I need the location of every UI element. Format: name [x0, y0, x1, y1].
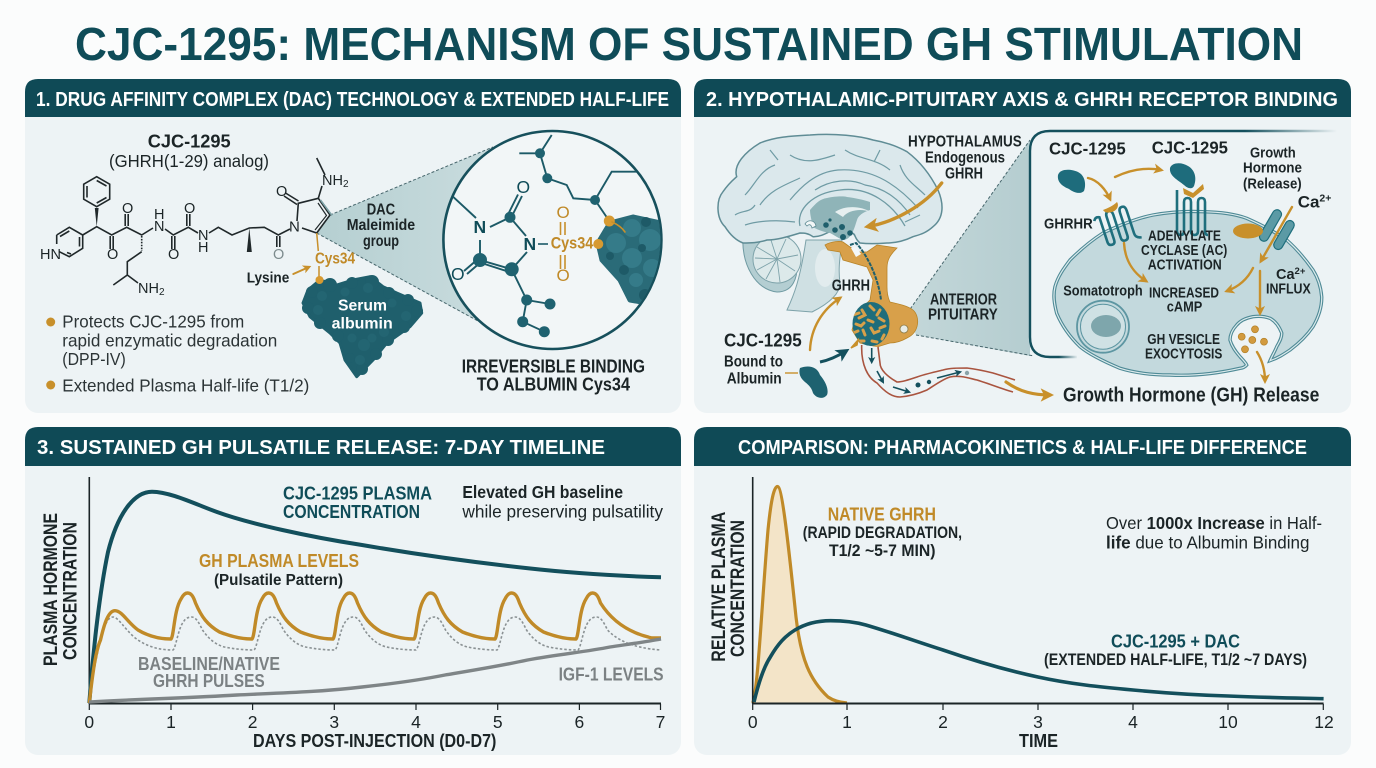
cerebrum — [718, 134, 942, 244]
labels: hypothalamus: GHRH — [945, 165, 983, 182]
bullet list: rapid enzymatic degradation — [62, 331, 277, 351]
panel: DAC technology — [25, 79, 681, 413]
y axis title — [41, 513, 81, 666]
bullet list: Extended Plasma Half-life (T1/2) — [62, 376, 309, 396]
tick labels: 4 — [411, 712, 421, 732]
albumin label: Serum — [338, 298, 387, 315]
inset: somatotroph cell — [1030, 131, 1337, 381]
inset labels: CYCLASE (AC) — [1141, 243, 1227, 259]
tick labels: 0 — [748, 712, 758, 732]
label: IGF-1: IGF-1 LEVELS — [559, 664, 664, 685]
chemical structure of CJC-1295: O — [184, 201, 195, 217]
inset labels: Ca — [1298, 192, 1319, 211]
note: elevated baseline: while preserving pulsatility — [461, 502, 663, 522]
brain folds — [735, 150, 925, 226]
maleimide ring — [451, 148, 600, 337]
panel 3 header: 3. SUSTAINED GH PULSATILE RELEASE: 7-DAY TIMELINE — [37, 436, 605, 459]
inset labels: (Release) — [1243, 176, 1302, 192]
tick labels: 2 — [938, 712, 948, 732]
axes and ticks — [753, 477, 1324, 710]
bullet list: Protects CJC-1295 from — [62, 311, 244, 331]
magnification cone — [902, 140, 1034, 356]
native GHRH area fill — [753, 486, 847, 703]
albumin label — [332, 298, 393, 332]
inset labels: 2+ — [1319, 192, 1331, 204]
label: DAC maleimide group: group — [363, 233, 399, 250]
chemical structure of CJC-1295: H — [154, 207, 164, 223]
maleimide ring: O — [451, 264, 465, 284]
chemical structure of CJC-1295: 2 — [343, 179, 349, 190]
label: growth hormone release: Growth Hormone (GH) Release — [1063, 385, 1319, 407]
tick labels: 3 — [1033, 712, 1043, 732]
albumin fragment — [598, 217, 670, 303]
tick labels: 4 — [1128, 712, 1138, 732]
label: baseline native pulses: BASELINE/NATIVE — [138, 653, 280, 674]
caption: irreversible binding — [462, 355, 645, 395]
note: half-life increase — [1106, 513, 1322, 553]
magnified circle: maleimide binding — [443, 131, 670, 349]
inset labels: cAMP — [1167, 300, 1203, 316]
icon: albumin complex with arrow — [799, 340, 858, 398]
chemical structure of CJC-1295: NH — [138, 281, 159, 297]
tick labels: 2 — [248, 712, 257, 732]
label: CJC-1295 plasma — [283, 482, 432, 522]
molecule name: CJC-1295 — [148, 131, 231, 152]
arrow: hypothalamus input — [868, 183, 942, 226]
curve: baseline native GHRH pulses — [89, 617, 661, 703]
label: native GHRH: (RAPID DEGRADATION, — [803, 524, 962, 542]
inset labels: Growth — [1250, 145, 1296, 161]
chemical structure of CJC-1295: H — [198, 240, 208, 256]
label: CJC-1295 plasma: CJC-1295 PLASMA — [283, 482, 432, 503]
chemical structure of CJC-1295: N — [289, 218, 300, 236]
y axis title: CONCENTRATION — [60, 522, 81, 660]
bound ligand — [1183, 184, 1204, 198]
chemical structure of CJC-1295: N — [198, 228, 208, 244]
inset labels: 2+ — [1295, 266, 1306, 277]
labels: anterior pituitary: ANTERIOR — [930, 291, 997, 308]
inset labels: CJC-1295 — [1049, 138, 1126, 158]
inset labels: Hormone — [1243, 161, 1302, 177]
maleimide ring: N — [524, 234, 536, 254]
calcium channel — [1258, 208, 1296, 251]
thalamus — [810, 196, 870, 240]
CJC-1295 ligand, free — [1058, 170, 1085, 193]
label: baseline native pulses — [138, 653, 280, 691]
cysteine linkage: Cys34 — [551, 234, 594, 252]
tick labels: 1 — [842, 712, 852, 732]
chemical structure of CJC-1295: N — [154, 219, 164, 235]
label: CJC-1295 + DAC — [1044, 631, 1307, 669]
chemical structure of CJC-1295: O — [168, 247, 179, 263]
label: CJC-1295 + DAC: CJC-1295 + DAC — [1111, 631, 1240, 652]
chemical structure of CJC-1295: O — [273, 247, 284, 263]
inset labels: Somatotroph — [1063, 283, 1143, 300]
panel 1 header: 1. DRUG AFFINITY COMPLEX (DAC) TECHNOLOGY & EXTENDED HALF-LIFE — [36, 88, 669, 111]
inset labels: GHRHR — [1044, 215, 1093, 232]
label: native GHRH: T1/2 ~5-7 MIN) — [829, 542, 936, 560]
inset labels — [1044, 137, 1331, 362]
label: GH plasma levels — [199, 550, 359, 589]
hypothalamic neurons — [823, 218, 853, 240]
ligand on left receptor — [1103, 202, 1118, 213]
label: native GHRH: NATIVE GHRH — [828, 504, 936, 525]
labels: Cys34 and lysine: Cys34 — [315, 250, 355, 267]
label: DAC maleimide group — [347, 201, 416, 250]
panel 2 header — [694, 79, 1351, 117]
tick labels: 6 — [575, 712, 584, 732]
panel 4 header: COMPARISON: PHARMACOKINETICS & HALF-LIFE DIFFERENCE — [738, 436, 1307, 459]
inset labels: CJC-1295 — [1152, 137, 1228, 157]
vesicle granules — [1238, 326, 1268, 353]
GH store — [1233, 224, 1263, 238]
tick labels: 7 — [656, 712, 665, 732]
curve: native GHRH — [753, 486, 847, 703]
note: elevated baseline: Elevated GH baseline — [462, 482, 623, 502]
chemical structure of CJC-1295: O — [107, 247, 118, 263]
curve: CJC-1295 + DAC — [754, 621, 1324, 702]
inset labels: Ca — [1276, 267, 1295, 283]
chemical structure of CJC-1295: O — [122, 201, 133, 217]
brainstem — [787, 240, 842, 312]
panel 2 header: 2. HYPOTHALAMIC-PITUITARY AXIS & GHRH RECEPTOR BINDING — [706, 88, 1338, 111]
panel: pharmacokinetics comparison — [694, 427, 1351, 755]
label: CJC-1295 bound to albumin: Albumin — [727, 370, 782, 387]
bullet list: (DPP-IV) — [62, 349, 126, 369]
chemical structure of CJC-1295: 2 — [159, 287, 165, 298]
labels: Cys34 and lysine: Lysine — [247, 269, 289, 286]
chemical structure of CJC-1295: HN — [40, 247, 61, 263]
illustration: brain and pituitary — [718, 134, 942, 347]
tick labels: 0 — [84, 712, 94, 732]
maleimide ring: O — [516, 177, 530, 197]
y axis title: PLASMA HORMONE — [41, 513, 62, 666]
tick labels: 3 — [329, 712, 339, 732]
chemical structure of CJC-1295 — [40, 158, 349, 298]
note: elevated baseline — [461, 482, 663, 522]
inset labels: INCREASED — [1149, 285, 1219, 301]
cell arrows — [1088, 169, 1292, 381]
label: CJC-1295 bound to albumin: CJC-1295 — [724, 331, 802, 351]
tick labels: 10 — [1218, 712, 1238, 732]
inset labels: INFLUX — [1266, 281, 1311, 297]
tick labels — [84, 712, 665, 732]
panel 3 header — [25, 427, 681, 466]
inset labels: EXOCYTOSIS — [1145, 346, 1223, 362]
caption: irreversible binding: TO ALBUMIN Cys34 — [477, 374, 631, 395]
inset labels: ACTIVATION — [1148, 257, 1222, 273]
tick labels: 5 — [493, 712, 503, 732]
panel 4 header — [694, 427, 1351, 466]
GH transport arrows — [872, 348, 969, 392]
label: GHRH: GHRH — [832, 278, 870, 295]
cysteine linkage: O — [556, 266, 570, 285]
label: CJC-1295 bound to albumin — [724, 331, 802, 387]
caption: irreversible binding: IRREVERSIBLE BINDING — [462, 355, 645, 376]
curve: CJC-1295 plasma — [89, 492, 661, 703]
line chart: half-life comparison — [709, 477, 1334, 751]
bullet list — [46, 311, 309, 396]
nucleus — [1077, 301, 1129, 353]
label: GH plasma levels: (Pulsatile Pattern) — [214, 572, 343, 589]
arrow: to GH release — [1006, 382, 1050, 395]
labels: Cys34 and lysine — [247, 250, 355, 286]
tick labels: 12 — [1314, 712, 1334, 732]
molecule name: (GHRH(1-29) analog) — [109, 151, 269, 171]
note: half-life increase: Over 1000x Increase in Half- — [1106, 513, 1322, 533]
x axis title: DAYS POST-INJECTION (D0-D7) — [253, 731, 496, 751]
panel: hypothalamic-pituitary axis — [694, 79, 1351, 413]
GHRHR receptor centre — [1177, 190, 1208, 235]
chemical structure of CJC-1295: NH — [322, 173, 343, 189]
axes and ticks — [89, 477, 661, 710]
CJC-1295 ligand, bound — [1170, 163, 1195, 188]
albumin label: albumin — [332, 315, 393, 332]
labels: hypothalamus: HYPOTHALAMUS — [908, 134, 1022, 151]
label: DAC maleimide group: DAC — [367, 201, 395, 218]
chemical structure of CJC-1295: O — [276, 184, 287, 200]
labels: hypothalamus: Endogenous — [925, 149, 1005, 166]
cysteine linkage: O — [556, 203, 570, 222]
label: DAC maleimide group: Maleimide — [347, 217, 416, 234]
cysteine linkage — [538, 203, 625, 285]
curve: IGF-1 levels — [89, 639, 661, 702]
note: half-life increase: life due to Albumin Binding — [1106, 533, 1310, 553]
label: CJC-1295 bound to albumin: Bound to — [724, 354, 783, 371]
y axis title — [709, 511, 749, 662]
labels: anterior pituitary: PITUITARY — [928, 306, 998, 323]
labels: hypothalamus — [908, 134, 1022, 182]
panel 1 header — [25, 79, 681, 117]
icon: serum albumin protein — [302, 275, 423, 377]
blood vessels — [862, 345, 1015, 397]
cerebellum — [743, 230, 801, 292]
maleimide ring: N — [474, 217, 486, 237]
GHRHR receptor left — [1093, 204, 1142, 250]
y axis title: CONCENTRATION — [728, 520, 749, 657]
inset labels: GH VESICLE — [1147, 332, 1220, 348]
arrow: CJC-1295 to GHRH — [810, 298, 840, 350]
label: baseline native pulses: GHRH PULSES — [153, 670, 265, 691]
inset labels: ADENYLATE — [1148, 229, 1221, 245]
label: CJC-1295 + DAC: (EXTENDED HALF-LIFE, T1/2 ~7 DAYS) — [1044, 651, 1307, 669]
cell body — [1054, 211, 1322, 375]
molecule name — [109, 131, 269, 171]
label: native GHRH — [803, 504, 962, 560]
curve: GH plasma levels — [89, 593, 661, 703]
title: CJC-1295: MECHANISM OF SUSTAINED GH STIMULATION — [75, 18, 1303, 70]
pituitary stalk and posterior lobe — [825, 241, 918, 347]
anterior pituitary lobe — [852, 302, 908, 346]
tick labels: 1 — [166, 712, 176, 732]
line chart: 7-day timeline — [41, 477, 665, 751]
magnification cone — [317, 147, 493, 323]
portal stalk — [850, 243, 881, 300]
x axis title: TIME — [1019, 731, 1058, 751]
label: CJC-1295 plasma: CONCENTRATION — [283, 501, 420, 522]
label: GH plasma levels: GH PLASMA LEVELS — [199, 550, 359, 571]
panel: sustained GH release timeline — [25, 427, 681, 755]
tick labels — [748, 712, 1334, 732]
y axis title: RELATIVE PLASMA — [709, 511, 730, 662]
labels: anterior pituitary — [928, 291, 998, 323]
